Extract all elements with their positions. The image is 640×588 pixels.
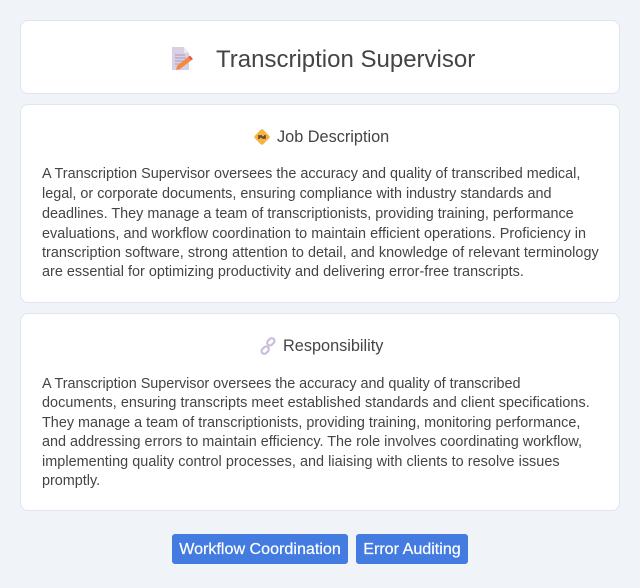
- job description text: transcription software, strong attention to detail, and knowledge of relevant terminology: [42, 245, 599, 261]
- responsibility text: [42, 376, 590, 489]
- tag: workflow coordination: [172, 534, 348, 564]
- responsibility text: They manage a team of transcriptionists, providing training, monitoring performance,: [42, 415, 580, 431]
- job description text: deadlines. They manage a team of transcriptionists, providing training, performance: [42, 206, 574, 222]
- panel: job description: [20, 104, 620, 303]
- panel: responsibility: [20, 313, 620, 511]
- responsibility text: A Transcription Supervisor oversees the accuracy and quality of transcribed: [42, 376, 520, 392]
- icon: document with pencil: [172, 47, 193, 70]
- icon: link: [260, 337, 276, 355]
- title: Transcription Supervisor: [216, 46, 475, 73]
- panel: title card: [20, 20, 620, 94]
- tag: error auditing: Error Auditing: [363, 540, 461, 558]
- responsibility text: documents, ensuring transcripts meet established standards and client specifications.: [42, 395, 590, 411]
- job description text: [42, 166, 599, 280]
- responsibility text: and addressing errors to maintain efficiency. The role involves coordinating workflow,: [42, 434, 582, 450]
- job description text: A Transcription Supervisor oversees the accuracy and quality of transcribed medical,: [42, 166, 580, 182]
- heading: job description: Job Description: [277, 128, 389, 146]
- icon: orange diamond: [254, 129, 270, 145]
- responsibility text: promptly.: [42, 473, 100, 489]
- job description text: evaluations, and workflow coordination to maintain efficient operations. Proficiency in: [42, 226, 586, 242]
- job description text: are essential for optimizing productivity and delivering error-free transcripts.: [42, 264, 524, 280]
- tag: workflow coordination: Workflow Coordination: [179, 540, 341, 558]
- responsibility text: implementing quality control processes, and liaising with clients to resolve issues: [42, 454, 560, 470]
- heading: responsibility: Responsibility: [283, 337, 383, 355]
- job description text: legal, or corporate documents, ensuring compliance with industry standards and: [42, 186, 552, 202]
- tag: error auditing: [356, 534, 468, 564]
